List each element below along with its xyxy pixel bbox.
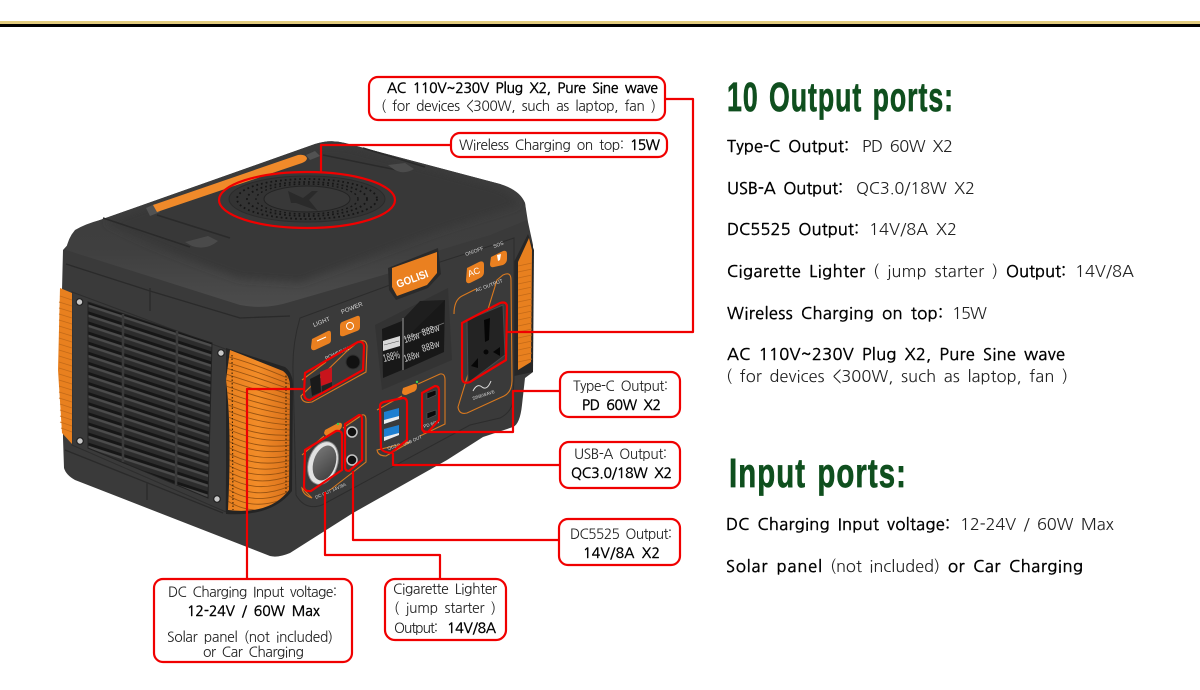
callout: cigarette lighter: Cigarette Lighter [393, 582, 498, 597]
USB-A spec [727, 181, 975, 197]
solar spec [726, 558, 1083, 575]
right gutter [514, 234, 534, 376]
logo tag [388, 248, 441, 300]
AC and SOS buttons [465, 240, 507, 283]
DC5525 spec: DC5525 Output: [727, 222, 859, 238]
grille dividers [123, 314, 177, 485]
callout: DC5525: DC5525 Output: [570, 528, 672, 542]
callout: cigarette lighter: Output: [394, 622, 438, 636]
callout: USB-A: QC3.0/18W X2 [571, 467, 672, 481]
USB port group: QC3.0 [387, 442, 401, 451]
cigarette lighter spec: 14V/8A [1075, 264, 1134, 280]
USB-A spec: QC3.0/18W X2 [856, 181, 975, 197]
right strip ribs [518, 263, 532, 362]
USB port group: USB OUT [402, 434, 423, 447]
right orange strip body [518, 238, 532, 370]
callout: DC5525: 14V/8A X2 [583, 547, 660, 561]
Type-C spec [727, 139, 953, 155]
screws [76, 299, 224, 502]
USB port group [377, 374, 445, 456]
DC input spec: DC Charging Input voltage: [726, 517, 950, 533]
AC and SOS buttons: AC [466, 265, 482, 279]
callout: wireless charging: Wireless Charging on top: [459, 138, 624, 153]
ventilation grille [88, 302, 212, 498]
center orange grip body [226, 350, 290, 511]
body silhouette [62, 141, 533, 557]
red highlight: DC5525 ports [345, 415, 362, 471]
red highlight: Type-C ports [422, 386, 439, 432]
solar spec: (not included) [830, 558, 940, 575]
red highlight: USB-A ports [380, 398, 407, 453]
light and power buttons: POWER [341, 302, 364, 316]
DC5525 spec [727, 222, 957, 238]
Type-C spec: Type-C Output: [727, 139, 849, 155]
connector lines [247, 99, 693, 578]
LCD display: 188w [403, 330, 422, 346]
red highlight: power in [304, 342, 364, 400]
left orange grip [58, 288, 72, 444]
LCD display: 188w [403, 349, 422, 365]
callout: wireless charging: 15W [630, 139, 661, 153]
AC output socket: AC OUTPUT [475, 278, 504, 294]
AC and SOS buttons: SOS [493, 240, 505, 250]
AC and SOS buttons: ON/OFF [465, 246, 484, 258]
heading: 10 Output ports: 10 Output ports: [727, 74, 954, 120]
lid seam [65, 264, 290, 513]
input ports list [726, 517, 1114, 575]
left side panel [72, 292, 228, 512]
solar spec: or Car Charging [948, 559, 1083, 575]
callout: AC plug: ( for devices <300W, such as laptop, fan ) [381, 99, 656, 114]
power in port group [301, 341, 367, 402]
LCD display: 888w [421, 323, 442, 339]
solar spec: Solar panel [726, 559, 822, 575]
AC spec: ( for devices <300W, such as laptop, fan ) [726, 368, 1068, 385]
USB-A spec: USB-A Output: [727, 181, 843, 197]
cigarette lighter spec [727, 263, 1134, 280]
callout: USB-A [560, 442, 680, 488]
DC5525 spec: 14V/8A X2 [869, 222, 957, 238]
left grip ribs [59, 296, 72, 432]
wireless spec: 15W [952, 306, 987, 322]
front control panel [293, 238, 514, 507]
grip ribs [226, 355, 292, 510]
power station product illustration [58, 141, 534, 557]
grip recess [226, 348, 293, 514]
callout: DC5525 [559, 519, 680, 565]
callout: AC plug [369, 77, 665, 120]
callout: DC charging input: or Car Charging [203, 645, 304, 660]
orange top handle [153, 155, 307, 212]
wireless charging pad [229, 176, 385, 222]
LCD display: 188% [382, 349, 401, 365]
callout: cigarette lighter: 14V/8A [447, 622, 496, 636]
USB port group: PD 60W [423, 419, 441, 429]
DC output group [302, 415, 366, 500]
wireless spec: Wireless Charging on top: [727, 306, 943, 322]
callout: Type-C: PD 60W X2 [582, 399, 661, 413]
lid [66, 141, 527, 307]
DC input spec [726, 517, 1114, 533]
AC output socket: SINEWAVE [472, 389, 495, 401]
callout: AC plug: AC 110V~230V Plug X2, Pure Sine wave [387, 81, 658, 96]
callout: DC charging input [154, 579, 352, 662]
power in port group: POWER IN [324, 346, 350, 362]
LCD display: 888w [421, 339, 442, 355]
LCD display [375, 288, 452, 390]
logo tag: GOLISI [395, 268, 430, 291]
callout: USB-A: USB-A Output: [574, 448, 667, 462]
AC output socket [454, 274, 512, 413]
output ports list [726, 139, 1134, 385]
callout: cigarette lighter: ( jump starter ) [394, 601, 496, 616]
callout: Type-C [560, 372, 680, 417]
red highlight: wireless pad [219, 172, 395, 228]
red highlight: AC socket [462, 302, 507, 383]
AC spec: AC 110V~230V Plug X2, Pure Sine wave [727, 347, 1065, 363]
callout: Type-C: Type-C Output: [573, 380, 668, 394]
header rule [0, 21, 1200, 27]
callout: DC charging input: DC Charging Input voltage: [168, 585, 337, 600]
heading: Input ports: Input ports: [729, 450, 907, 496]
callout: cigarette lighter [385, 579, 506, 640]
callout: DC charging input: Solar panel (not included) [167, 630, 333, 645]
callout: DC charging input: 12-24V / 60W Max [187, 605, 320, 619]
cigarette lighter spec: ( jump starter ) [873, 263, 998, 280]
light and power buttons [311, 302, 364, 350]
top face shading [182, 249, 372, 282]
Type-C spec: PD 60W X2 [862, 139, 953, 155]
red highlight: cigarette lighter [304, 431, 342, 491]
AC spec [726, 347, 1068, 385]
light and power buttons: LIGHT [313, 317, 331, 329]
carry handles [103, 148, 425, 248]
DC input spec: 12-24V / 60W Max [960, 517, 1114, 533]
callout: wireless charging [451, 133, 667, 157]
cigarette lighter spec: Cigarette Lighter [727, 264, 865, 280]
DC output group: DC OUT 14V/8A [314, 482, 347, 500]
cigarette lighter spec: Output: [1006, 264, 1066, 280]
